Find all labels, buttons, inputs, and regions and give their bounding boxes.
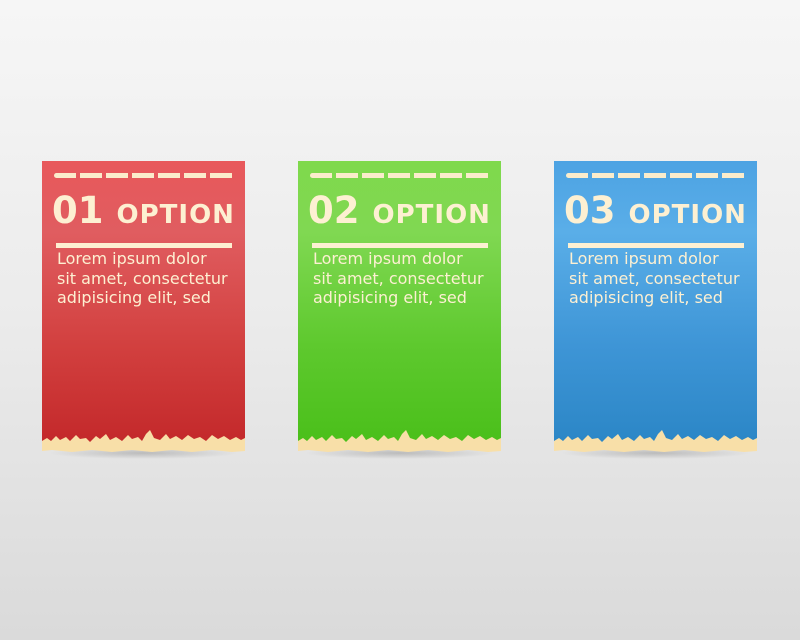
torn edge <box>42 430 245 452</box>
text block: Lorem ipsum dolor <box>57 249 207 268</box>
text block: Lorem ipsum dolor <box>569 249 719 268</box>
text block: adipisicing elit, sed <box>569 288 723 307</box>
heading: 03 option: 03 OPTION <box>564 189 747 232</box>
text block <box>313 249 484 307</box>
text block <box>569 249 740 307</box>
text block: sit amet, consectetur <box>569 268 740 288</box>
text block: Lorem ipsum dolor <box>313 249 463 268</box>
torn edge <box>298 430 501 452</box>
card: 02 option <box>298 161 501 458</box>
torn edge <box>554 430 757 452</box>
text block: sit amet, consectetur <box>313 268 484 288</box>
heading: 02 option: 02 OPTION <box>308 189 491 232</box>
heading: 01 option: 01 OPTION <box>52 189 235 232</box>
card: 03 option <box>554 161 757 458</box>
card: 01 option <box>42 161 245 458</box>
text block: adipisicing elit, sed <box>313 288 467 307</box>
text block: sit amet, consectetur <box>57 268 228 288</box>
text block: adipisicing elit, sed <box>57 288 211 307</box>
text block <box>57 249 228 307</box>
